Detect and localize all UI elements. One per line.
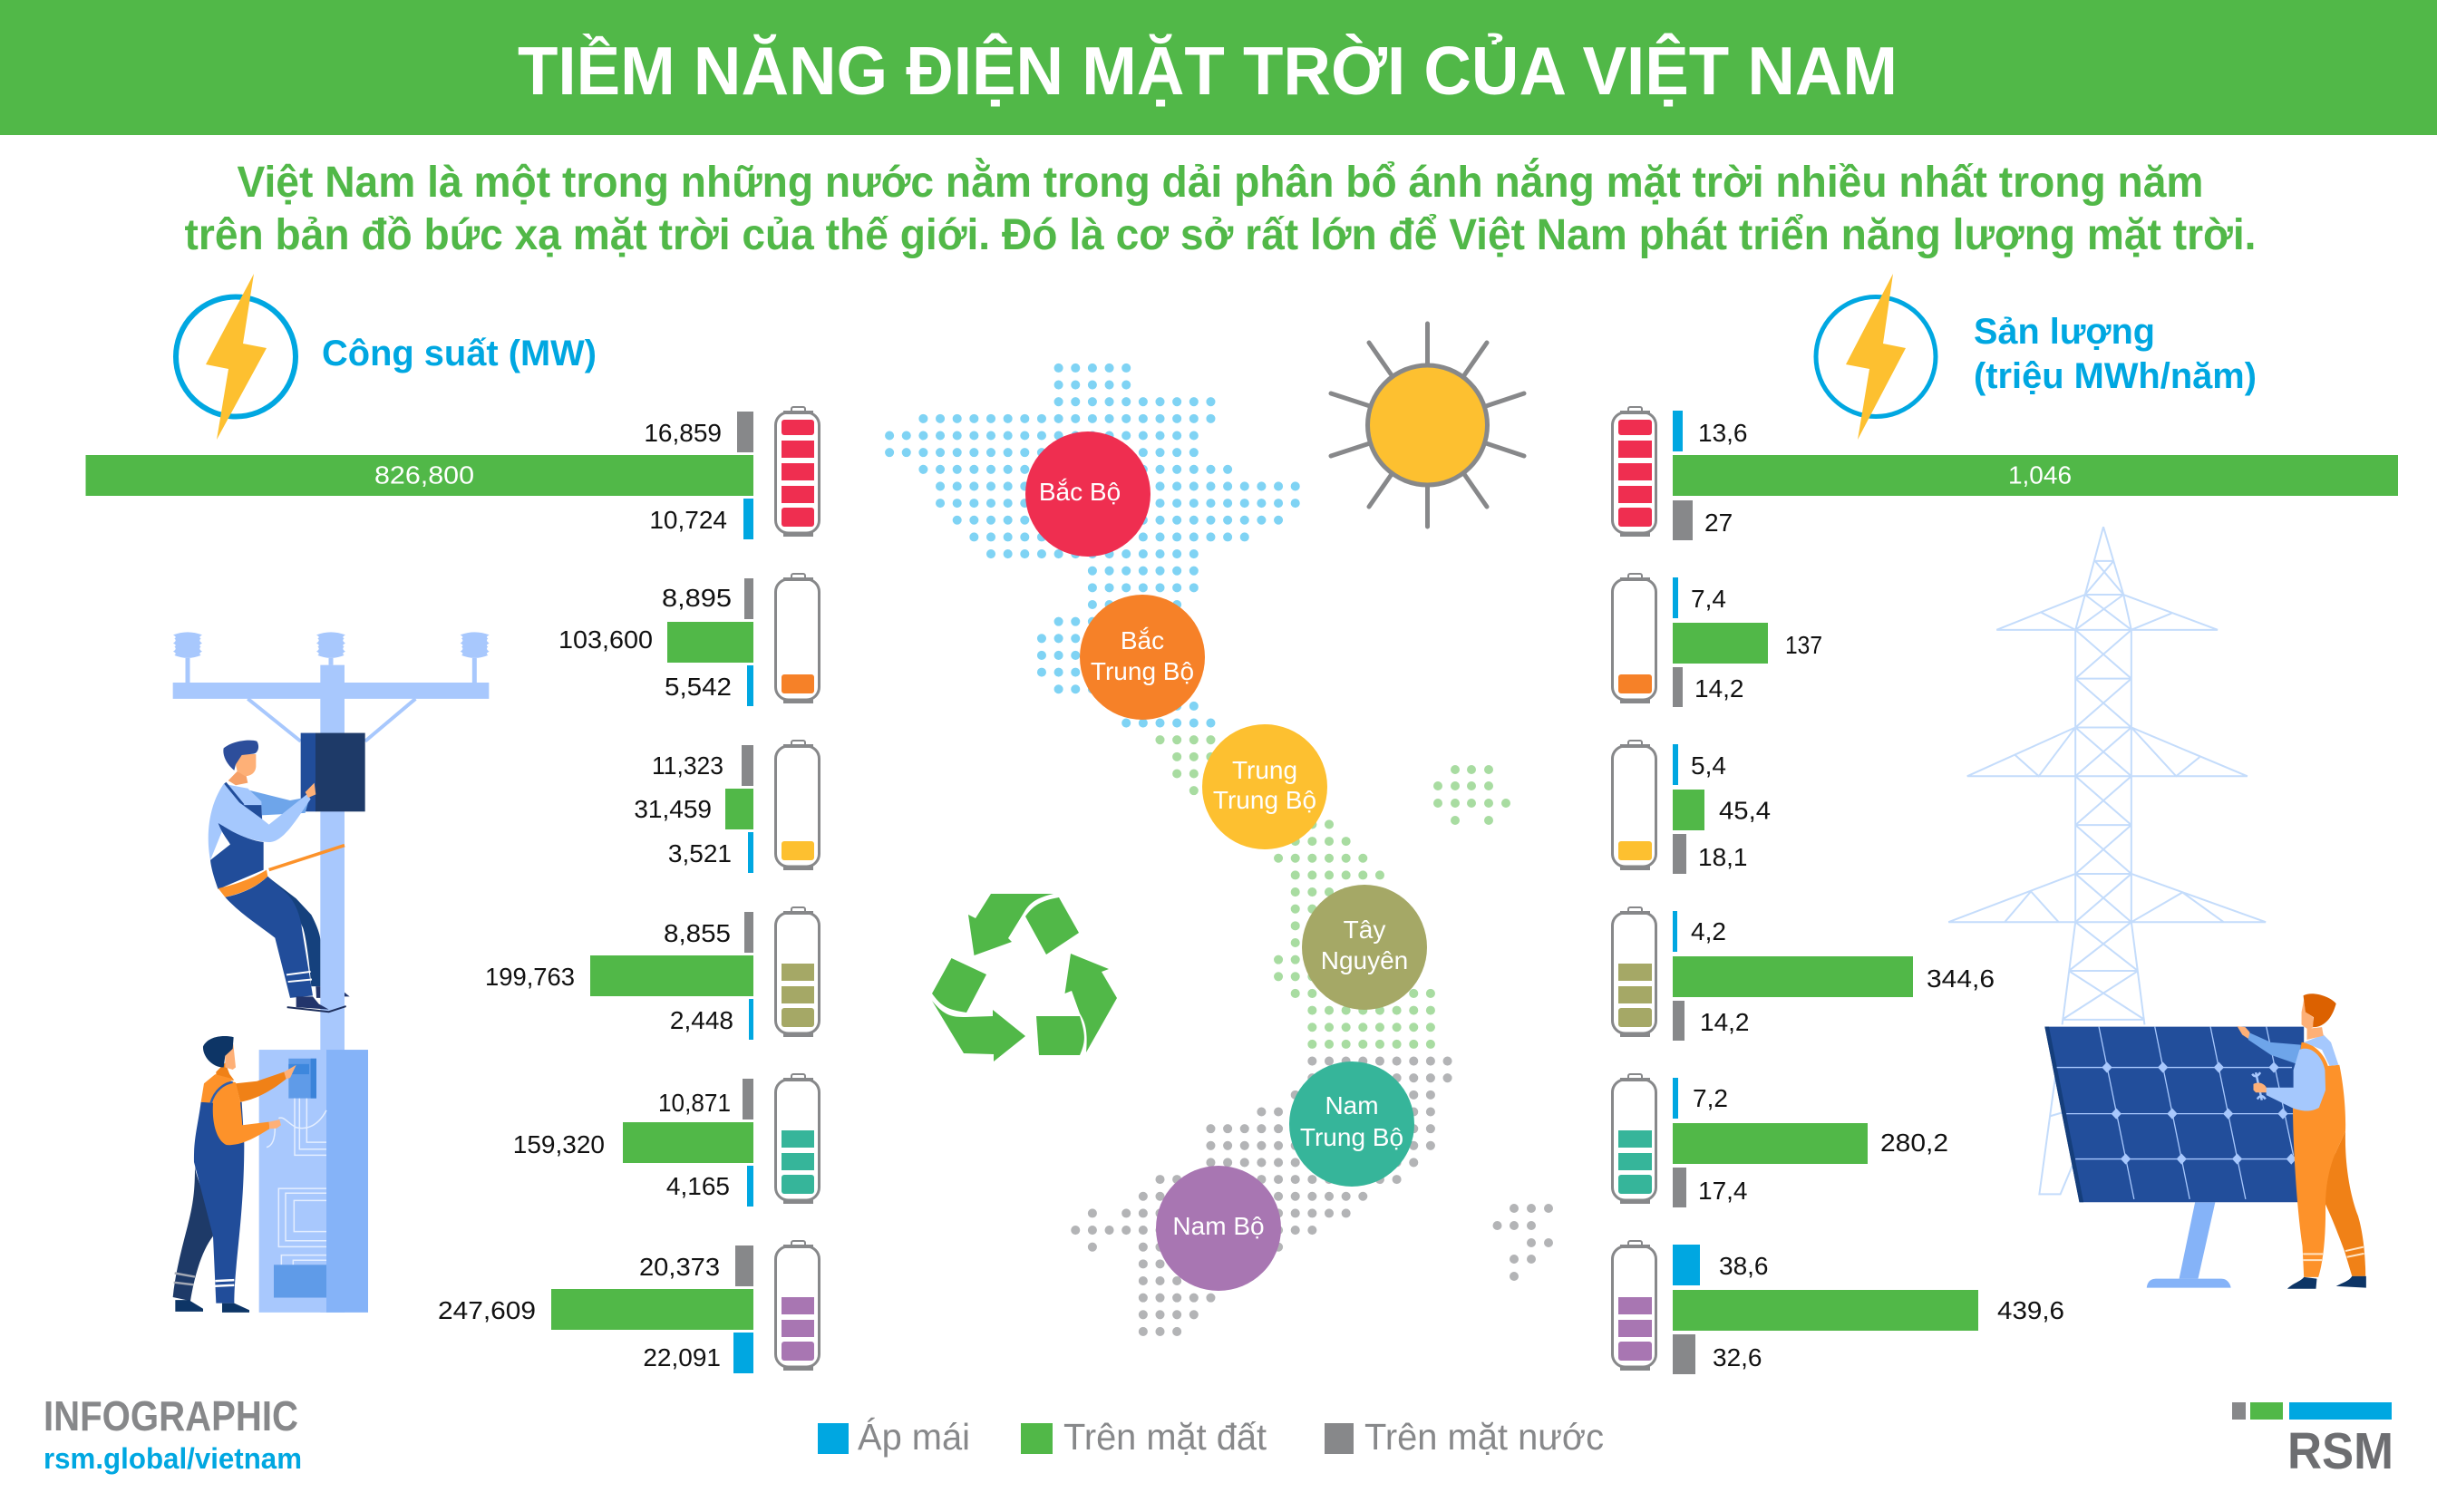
row: Tây Nguyên output: 14,2 <box>1700 1008 1750 1036</box>
row: Tây Nguyên output <box>1612 907 1995 1041</box>
region: Bắc Bộ <box>1025 431 1151 557</box>
row: Nam Bộ capacity <box>438 1241 820 1373</box>
row: Bắc Trung Bộ output: 14,2 <box>1694 674 1744 703</box>
row: Trung Trung Bộ capacity: 3,521 <box>668 839 732 867</box>
region: Nam Bộ <box>1156 1166 1281 1291</box>
row: Nam Trung Bộ output: 280,2 <box>1880 1129 1948 1157</box>
heading: output: (triệu MWh/năm) <box>1974 356 2257 396</box>
region: Nam Trung Bộ: Nam <box>1325 1091 1379 1119</box>
row: Bắc Bộ output: 1,046 <box>2008 460 2072 489</box>
row: Bắc Trung Bộ capacity <box>558 574 820 706</box>
region: Bắc Trung Bộ: Bắc <box>1121 626 1164 654</box>
Hoang Sa islands <box>1433 765 1510 825</box>
row: Bắc Trung Bộ output: 137 <box>1785 631 1822 659</box>
RSM logo <box>2232 1402 2393 1480</box>
region: Bắc Trung Bộ: Trung Bộ <box>1091 657 1194 685</box>
cabinet <box>259 1050 368 1313</box>
row: Nam Trung Bộ output: 7,2 <box>1693 1084 1728 1112</box>
illustration: solar panel with worker <box>2044 993 2366 1289</box>
row: Bắc Bộ capacity: 16,859 <box>644 419 722 447</box>
region: Nam Trung Bộ <box>1289 1061 1414 1187</box>
row: Tây Nguyên capacity: 199,763 <box>485 963 575 991</box>
region: Tây Nguyên <box>1302 885 1427 1010</box>
row: Trung Trung Bộ output: 5,4 <box>1691 751 1726 780</box>
intro text: Việt Nam là một trong những nước nằm trong dải phân bổ ánh nắng mặt trời nhiều nhất trong năm <box>238 157 2203 207</box>
region: Trung Trung Bộ: Trung Bộ <box>1213 786 1316 814</box>
illustration: pole and electricians <box>173 632 490 1313</box>
legend: Trên mặt đất <box>1063 1416 1267 1458</box>
row: Bắc Trung Bộ output <box>1612 574 1822 707</box>
right chart: output by region <box>1612 407 2398 1374</box>
row: Trung Trung Bộ capacity <box>634 741 820 873</box>
Truong Sa islands <box>1492 1204 1553 1281</box>
row: Nam Bộ output: 32,6 <box>1713 1343 1762 1371</box>
heading: capacity: Công suất (MW) <box>322 334 597 373</box>
panel worker <box>2238 993 2366 1289</box>
row: Bắc Trung Bộ capacity: 8,895 <box>662 584 732 612</box>
row: Trung Trung Bộ output <box>1612 741 1771 874</box>
standing worker <box>173 1036 296 1313</box>
row: Nam Bộ capacity: 247,609 <box>438 1296 536 1324</box>
row: Tây Nguyên output: 4,2 <box>1691 917 1726 945</box>
region: Nam Bộ: Nam Bộ <box>1172 1212 1265 1240</box>
region: Bắc Bộ: Bắc Bộ <box>1039 478 1121 506</box>
row: Bắc Bộ capacity: 826,800 <box>374 460 474 489</box>
title banner <box>0 0 2437 135</box>
icon: lightning capacity <box>176 274 296 440</box>
icon: recycle <box>932 894 1117 1061</box>
climbing worker <box>209 741 350 1012</box>
heading: output <box>1974 312 2257 396</box>
row: Bắc Bộ output: 13,6 <box>1698 419 1748 447</box>
row: Bắc Bộ output: 27 <box>1704 509 1733 537</box>
region: Trung Trung Bộ <box>1202 724 1327 849</box>
row: Nam Bộ capacity: 20,373 <box>639 1253 720 1281</box>
row: Nam Trung Bộ capacity: 10,871 <box>658 1089 731 1117</box>
region: Trung Trung Bộ: Trung <box>1232 756 1297 784</box>
region: Tây Nguyên: Nguyên <box>1321 946 1408 974</box>
row: Nam Bộ output: 38,6 <box>1719 1252 1768 1280</box>
row: Trung Trung Bộ capacity: 11,323 <box>652 751 723 780</box>
region: Bắc Trung Bộ <box>1080 595 1205 720</box>
row: Nam Trung Bộ output: 17,4 <box>1698 1177 1748 1205</box>
intro text <box>185 157 2256 259</box>
heading: output: Sản lượng <box>1974 312 2155 352</box>
row: Nam Trung Bộ output <box>1612 1074 1948 1207</box>
row: Nam Trung Bộ capacity: 159,320 <box>513 1130 605 1158</box>
panel stand <box>2147 1202 2231 1288</box>
row: Trung Trung Bộ output: 45,4 <box>1719 796 1771 825</box>
row: Tây Nguyên output: 344,6 <box>1927 964 1995 993</box>
row: Trung Trung Bộ capacity: 31,459 <box>634 795 712 823</box>
legend <box>818 1416 1604 1458</box>
row: Bắc Trung Bộ capacity: 103,600 <box>558 625 653 654</box>
footer brand text <box>44 1392 302 1475</box>
region: Nam Trung Bộ: Trung Bộ <box>1300 1123 1403 1151</box>
row: Nam Trung Bộ capacity <box>513 1074 820 1207</box>
title: TIỀM NĂNG ĐIỆN MẶT TRỜI CỦA VIỆT NAM <box>518 33 1898 109</box>
RSM logo: RSM <box>2287 1422 2393 1480</box>
illustration: transmission tower <box>1948 527 2266 1194</box>
solar panel <box>2044 1027 2304 1202</box>
row: Bắc Bộ capacity: 10,724 <box>649 506 727 534</box>
icon: sun <box>1331 324 1524 527</box>
row: Trung Trung Bộ output: 18,1 <box>1698 843 1748 871</box>
row: Tây Nguyên capacity <box>485 907 820 1040</box>
row: Bắc Bộ capacity <box>85 407 820 539</box>
footer brand text: rsm.global/vietnam <box>44 1442 302 1475</box>
legend: Trên mặt nước <box>1364 1416 1604 1458</box>
legend: Áp mái <box>858 1416 970 1458</box>
row: Nam Bộ capacity: 22,091 <box>643 1343 721 1371</box>
row: Bắc Bộ output <box>1612 407 2398 540</box>
intro text: trên bản đồ bức xạ mặt trời của thế giới. Đó là cơ sở rất lớn để Việt Nam phát triển năng lượng mặt trời. <box>185 211 2256 259</box>
left chart: capacity by region <box>85 407 820 1373</box>
map of Vietnam made of dots <box>889 368 1448 1332</box>
row: Bắc Trung Bộ output: 7,4 <box>1691 585 1726 613</box>
row: Tây Nguyên capacity: 2,448 <box>670 1006 733 1034</box>
row: Nam Bộ output: 439,6 <box>1997 1296 2064 1324</box>
region: Tây Nguyên: Tây <box>1344 916 1385 944</box>
row: Nam Bộ output <box>1612 1241 2064 1374</box>
footer brand text: INFOGRAPHIC <box>44 1392 298 1439</box>
row: Nam Trung Bộ capacity: 4,165 <box>666 1172 730 1200</box>
row: Bắc Trung Bộ capacity: 5,542 <box>665 673 732 701</box>
icon: lightning output <box>1816 274 1936 440</box>
row: Tây Nguyên capacity: 8,855 <box>664 919 731 947</box>
